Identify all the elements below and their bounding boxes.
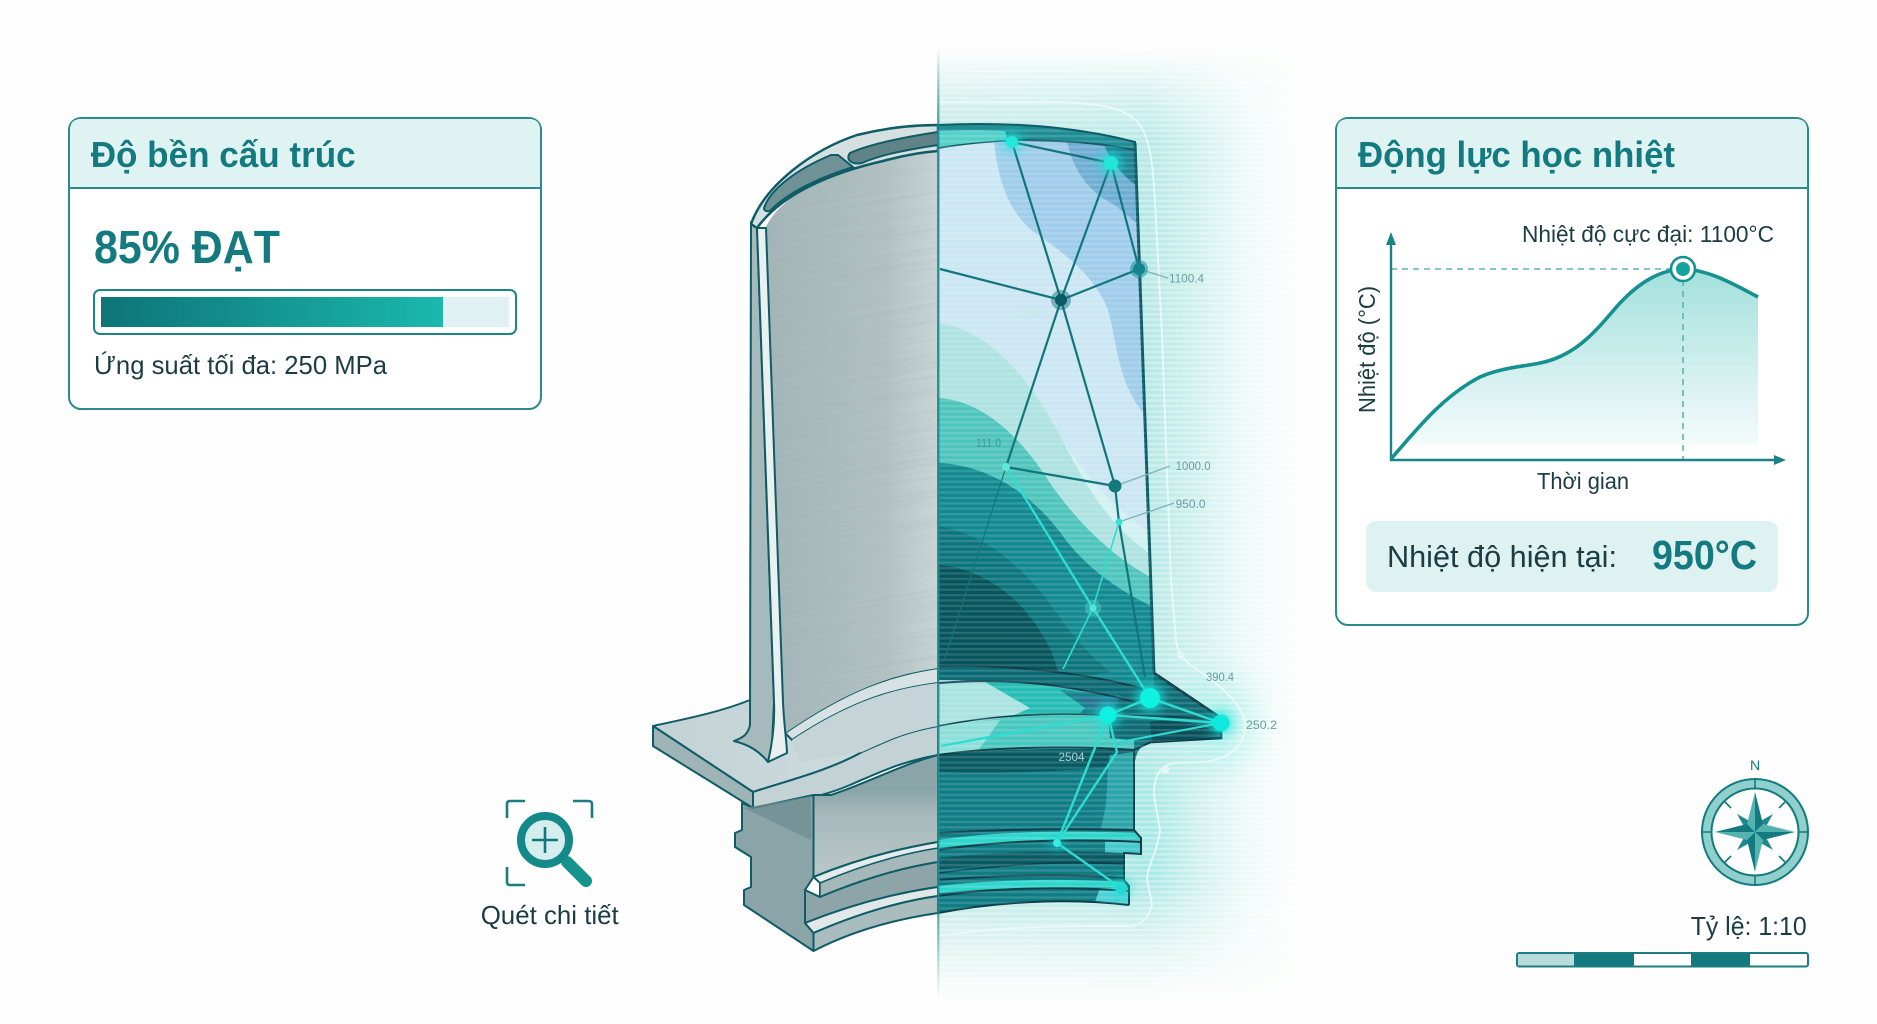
dividing line xyxy=(937,48,940,1000)
platform blue shade xyxy=(1076,697,1119,712)
line chart xyxy=(1354,221,1786,494)
contour very pale strip xyxy=(1048,414,1148,552)
reading labels: 1000.0 xyxy=(1176,459,1211,473)
mesh nodes xyxy=(1002,136,1230,894)
panel: scan background glow xyxy=(938,48,1300,1000)
mesh lines cyan xyxy=(941,467,1221,888)
base colour xyxy=(938,142,1148,530)
platform lower band pale xyxy=(979,715,1134,752)
panel: thermal dynamics xyxy=(1336,118,1808,625)
panel heading: Độ bền cấu trúc xyxy=(91,134,356,175)
blade top rim scan xyxy=(938,124,1135,150)
icon: detail scan magnifier xyxy=(481,801,619,930)
platform pale area xyxy=(938,680,1030,728)
reading labels xyxy=(976,272,1277,764)
panel header background xyxy=(1337,119,1807,188)
stress band blue light xyxy=(994,141,1144,413)
root bottom face xyxy=(814,896,938,951)
root and platform scan xyxy=(938,660,1228,920)
scan line overlay xyxy=(938,127,1221,913)
minor star points xyxy=(1737,814,1773,850)
metric: 85% pass: 85% ĐẠT xyxy=(94,221,280,273)
airfoil brushed texture xyxy=(913,229,937,661)
progress bar xyxy=(94,290,516,334)
scale bar xyxy=(1517,953,1808,966)
white dimension trace xyxy=(941,102,1245,936)
current temperature box xyxy=(1366,521,1778,592)
scan structure outlines xyxy=(938,666,1221,913)
scan label: Quét chi tiết xyxy=(481,900,619,930)
contour darkest xyxy=(940,565,1058,672)
ridge 2 end xyxy=(1095,888,1129,905)
panel frame xyxy=(1336,118,1808,625)
top platform dark band xyxy=(940,666,1130,696)
stress band blue mid xyxy=(1068,142,1136,223)
leading edge band xyxy=(734,222,774,762)
panel heading: Động lực học nhiệt xyxy=(1358,134,1675,175)
reading labels: 111.0 xyxy=(976,436,1001,450)
contour deep teal xyxy=(938,463,1160,700)
mesh lines dark xyxy=(940,142,1174,677)
ridge 1 cyan xyxy=(938,832,1140,848)
compass ring xyxy=(1707,784,1803,880)
platform tip darkest xyxy=(1150,721,1221,742)
panel header background xyxy=(70,119,540,188)
y axis label: Nhiệt độ (°C) xyxy=(1354,286,1380,413)
magnifier handle xyxy=(567,862,586,881)
blade face contour map xyxy=(938,120,1160,700)
illustration: turbine blade, physical half xyxy=(652,124,938,952)
reading labels: 390.4 xyxy=(1206,670,1234,684)
platform tip dark xyxy=(1108,673,1221,742)
scan brackets xyxy=(507,801,592,885)
root left shadow wedge xyxy=(744,796,811,840)
root base xyxy=(938,717,1150,912)
panel: structural strength xyxy=(69,118,541,409)
root right face xyxy=(814,755,938,877)
stress text: Ứng suất tối đa: 250 MPa xyxy=(94,350,388,380)
contour teal xyxy=(938,398,1150,606)
cooling slot rear xyxy=(848,132,938,163)
icon: compass rose xyxy=(1702,757,1808,885)
ridge 2 cyan xyxy=(938,880,1124,893)
area under curve xyxy=(1391,269,1758,459)
platform chevron teal xyxy=(985,682,1090,718)
reading labels: 250.2 xyxy=(1246,718,1277,732)
temperature curve xyxy=(1391,269,1758,459)
fillet surface xyxy=(785,668,938,740)
panel frame xyxy=(69,118,541,409)
reading labels: 200.0 xyxy=(1019,305,1047,319)
axis arrows xyxy=(1386,232,1786,465)
web top shade xyxy=(938,749,1134,773)
illustration: turbine blade, digital scan half xyxy=(937,48,1277,1000)
ridge 1 end xyxy=(1105,838,1141,854)
axes xyxy=(1391,240,1778,460)
blade top cap xyxy=(751,125,938,228)
upper ridge xyxy=(814,842,938,897)
upper ridge lower strip xyxy=(820,848,938,897)
lower ridge xyxy=(805,887,938,933)
groove dark xyxy=(938,852,1124,870)
peak marker xyxy=(1671,257,1695,281)
peak label: Nhiệt độ cực đại: 1100°C xyxy=(1522,221,1774,247)
scale label: Tỷ lệ: 1:10 xyxy=(1691,911,1807,941)
header divider xyxy=(69,187,541,189)
current temperature box: Nhiệt độ hiện tại: xyxy=(1387,539,1617,574)
magnifier lens xyxy=(521,816,569,864)
platform chevron dark xyxy=(1060,690,1136,748)
web right light xyxy=(1100,752,1134,830)
reading labels: 1100.4 xyxy=(1169,272,1204,286)
airfoil brushed metal xyxy=(766,151,938,733)
platform lower left pale xyxy=(938,720,1000,755)
trace nodes xyxy=(1040,100,1184,774)
header divider xyxy=(1336,187,1808,189)
groove between ridges xyxy=(805,862,938,923)
contour pale xyxy=(940,323,1149,576)
dashed guides xyxy=(1391,269,1683,459)
cooling slot front xyxy=(764,155,853,211)
platform top surface xyxy=(653,660,938,792)
leading edge highlight xyxy=(757,228,787,762)
stress band blue dark xyxy=(1104,146,1135,184)
blade right edge xyxy=(1135,143,1154,673)
mesh nodes glow xyxy=(1004,134,1232,896)
root left face xyxy=(735,795,814,951)
north label: N xyxy=(1750,757,1760,773)
ring ticks xyxy=(1702,779,1808,885)
main star points dark xyxy=(1715,792,1795,872)
current temperature box: 950°C xyxy=(1652,532,1757,578)
main star points light xyxy=(1715,792,1795,872)
magnifier plus xyxy=(532,827,558,853)
x axis label: Thời gian xyxy=(1537,468,1629,494)
reading labels: 2504 xyxy=(1058,750,1085,764)
platform side face xyxy=(653,726,753,808)
contour darker xyxy=(940,526,1110,676)
fillet lower shade xyxy=(792,683,938,762)
reading labels: 950.0 xyxy=(1176,497,1206,511)
platform front face xyxy=(753,726,938,808)
blade top rim highlight xyxy=(938,130,1008,147)
